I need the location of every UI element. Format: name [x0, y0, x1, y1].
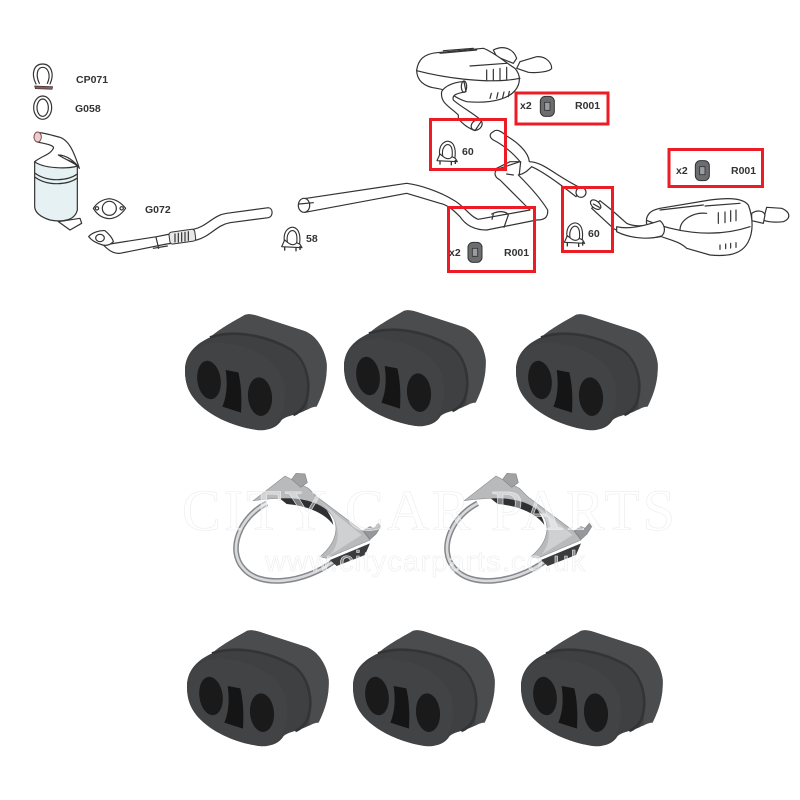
icon: flange gasket G072 — [93, 199, 126, 219]
icon: rubber mount lower — [468, 242, 482, 262]
diagram: right silencer — [589, 161, 789, 256]
icon: u-bolt clamp 60 — [437, 141, 457, 165]
callout: right R001 box — [669, 150, 762, 186]
callout: clamp 60 upper box: 60 — [462, 146, 474, 158]
callout: clamp 60 upper box — [430, 120, 506, 170]
icon: right silencer pipe — [589, 198, 663, 238]
callout: top R001 box: R001 — [575, 100, 600, 112]
callout: clamp 60 lower box — [562, 188, 612, 252]
photo: rubber mount top middle — [344, 310, 486, 426]
watermark: CITY CAR PARTS — [182, 478, 675, 543]
icon: catalytic converter — [34, 132, 82, 230]
photo: rubber mount bottom middle — [353, 630, 495, 746]
icon: clamp CP071 — [33, 64, 53, 89]
photo: rubber mount bottom left — [187, 630, 329, 746]
callout: top R001 box: x2 — [520, 100, 532, 112]
diagram: centre pipes and rear silencer — [282, 48, 586, 262]
callout: top R001 box — [516, 93, 608, 124]
label: G072: G072 — [145, 204, 171, 216]
watermark: www.citycarparts.co.uk — [264, 546, 586, 578]
icon: upper silencer — [417, 48, 552, 132]
photo: rubber mount top left — [185, 314, 327, 430]
icon: rubber mount right — [695, 161, 709, 181]
front pipe — [89, 208, 272, 253]
callout: right R001 box: x2 — [676, 165, 688, 177]
icon: right silencer — [617, 199, 789, 256]
callout: right R001 box: R001 — [731, 165, 756, 177]
label: CP071: CP071 — [76, 74, 108, 86]
icon: centre Y pipe — [298, 130, 586, 230]
callout: lower R001 box — [448, 208, 534, 272]
callout: lower R001 box: R001 — [504, 247, 529, 259]
callout: lower R001 box: x2 — [449, 247, 461, 259]
icon: gasket G058 — [34, 96, 52, 119]
photo: clamps pair — [236, 473, 592, 581]
label: 58: 58 — [306, 233, 318, 245]
icon: u-bolt clamp 60 lower — [564, 223, 585, 247]
label: G058: G058 — [75, 103, 101, 115]
callout: clamp 60 lower box: 60 — [588, 228, 600, 240]
icon: u-bolt clamp 58 — [282, 227, 302, 251]
photo: rubber mount bottom right — [521, 630, 663, 746]
diagram: catalytic converter and front pipe — [33, 64, 272, 253]
watermark — [182, 478, 675, 578]
photo: rubber mount top right — [516, 314, 658, 430]
icon: rubber mount — [540, 96, 554, 116]
